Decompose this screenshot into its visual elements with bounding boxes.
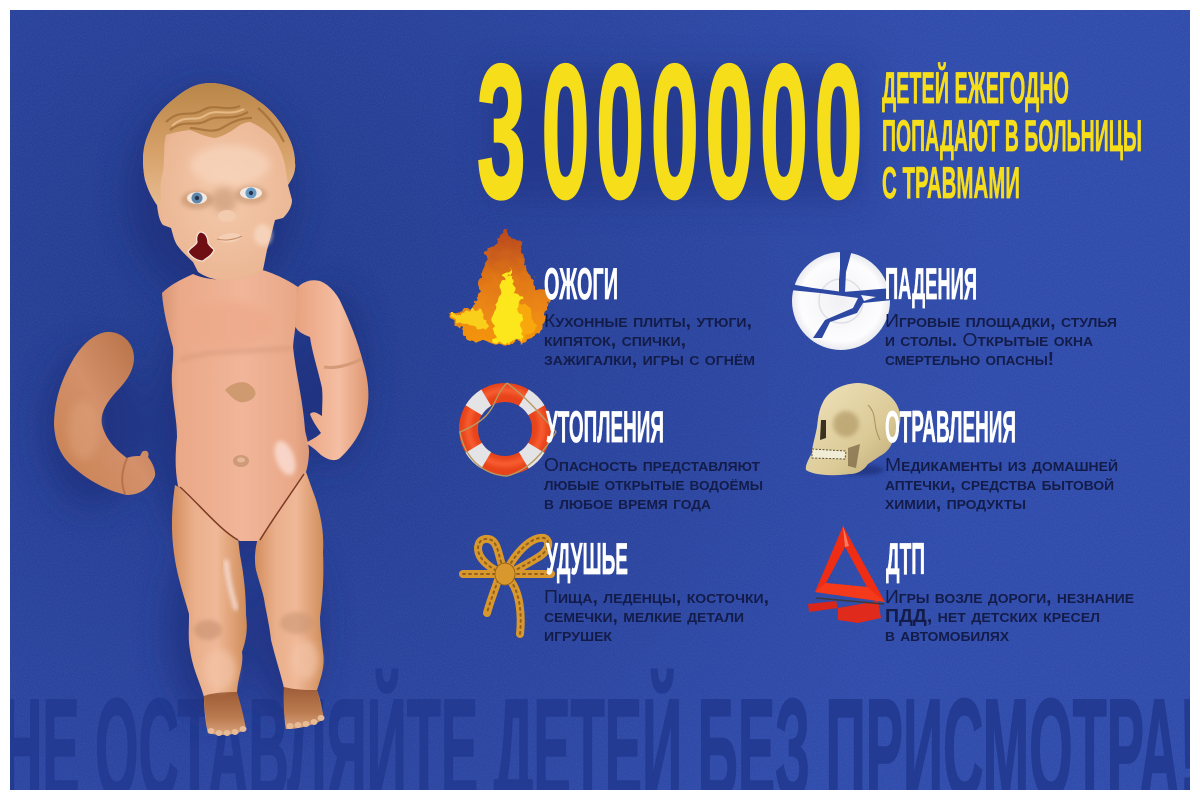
description: falls: смертельно опасны!	[885, 349, 1054, 369]
panel: road accidents	[808, 526, 1134, 645]
headline shadow	[490, 70, 860, 200]
digit three and zeros: 3	[477, 26, 526, 238]
description: falls: Игровые площадки, стулья	[885, 311, 1117, 331]
doll head	[143, 83, 295, 280]
panel: choking: УДУШЬЕ	[546, 535, 628, 584]
description: road accidents: ПДД, нет детских кресел	[885, 606, 1100, 626]
doll left leg	[172, 485, 247, 736]
icon: rope bow	[463, 538, 551, 634]
description: choking	[544, 587, 769, 645]
description: burns: Кухонные плиты, утюги,	[544, 311, 752, 331]
description: poisoning: Медикаменты из домашней	[885, 455, 1118, 475]
doll illustration	[42, 83, 368, 736]
description: poisoning: химии, продукты	[885, 493, 1026, 513]
description: drowning: в любое время года	[544, 493, 712, 513]
description: drowning: Опасность представляют	[544, 455, 760, 475]
doll shadow	[42, 88, 367, 718]
panel: falls: ПАДЕНИЯ	[885, 260, 977, 309]
panel: choking	[463, 535, 769, 645]
panel: burns: ОЖОГИ	[544, 260, 618, 309]
panel: falls	[790, 250, 1117, 369]
description: poisoning: аптечки, средства бытовой	[885, 474, 1114, 494]
description: falls: и столы. Открытые окна	[885, 330, 1094, 350]
panel: poisoning	[806, 383, 1118, 513]
headline number	[477, 26, 863, 238]
icon: skull	[806, 383, 900, 475]
panel: poisoning: ОТРАВЛЕНИЯ	[885, 403, 1016, 452]
icon: fire	[450, 232, 548, 344]
description: drowning	[544, 455, 763, 513]
doll right leg	[255, 472, 324, 729]
doll right arm	[295, 280, 368, 460]
doll torso	[162, 270, 309, 541]
description: road accidents: Игры возле дороги, незнание	[885, 587, 1134, 607]
panel: drowning	[460, 383, 763, 513]
icon: warning triangle	[808, 526, 885, 623]
description: burns: зажигалки, игры с огнём	[544, 349, 755, 369]
description: choking: игрушек	[544, 625, 612, 645]
panel: burns	[450, 232, 755, 369]
description: road accidents	[885, 587, 1134, 645]
headline caption: С ТРАВМАМИ	[882, 159, 1020, 208]
icon: life ring	[460, 383, 556, 476]
description: road accidents: в автомобилях	[885, 625, 1009, 645]
description: choking: семечки, мелкие детали	[544, 606, 744, 626]
panel: road accidents: ДТП	[886, 535, 925, 584]
description: falls	[885, 311, 1117, 369]
description: choking: Пища, леденцы, косточки,	[544, 587, 769, 607]
description: burns: кипяток, спички,	[544, 330, 686, 350]
digit three and zeros: 000000	[542, 26, 863, 238]
doll detached arm	[54, 332, 155, 495]
description: drowning: любые открытые водоёмы	[544, 474, 763, 494]
panel: drowning: УТОПЛЕНИЯ	[546, 403, 664, 452]
description: burns	[544, 311, 755, 369]
description: poisoning	[885, 455, 1118, 513]
wound on cheek	[188, 232, 214, 261]
headline caption	[882, 62, 1142, 208]
icon: broken plate	[790, 250, 893, 350]
